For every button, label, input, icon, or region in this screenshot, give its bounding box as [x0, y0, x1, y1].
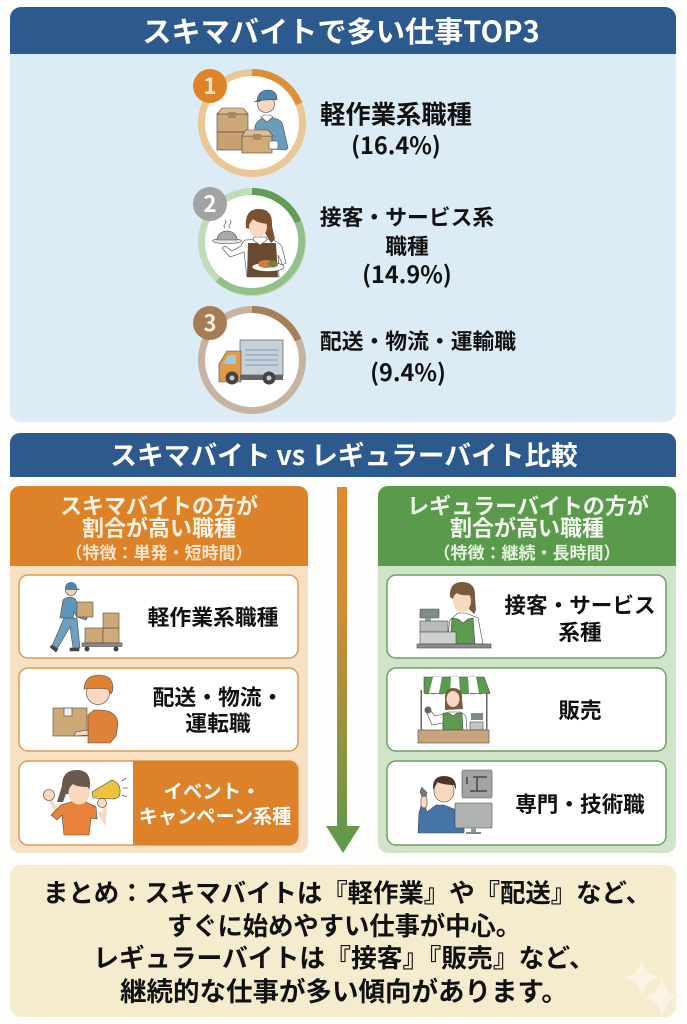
icon: delivery truck [219, 340, 283, 384]
label: キャンペーン系種 [139, 801, 291, 829]
label: 配送・物流・ [153, 681, 283, 712]
card: customer service [387, 575, 666, 658]
rank badge 1: 1 [204, 69, 216, 101]
summary text: すぐに始めやすい仕事が中心。 [167, 907, 521, 943]
label: light work: 軽作業系職種 [320, 96, 472, 132]
rank 1: light work [193, 69, 472, 174]
label: light work [320, 96, 472, 161]
label: 系種 [558, 616, 602, 647]
label: delivery: (9.4%) [370, 354, 446, 388]
panel: summary [10, 865, 677, 1017]
panel header: skima: （特徴：単発・短時間） [66, 539, 252, 564]
ring 1 [202, 72, 302, 174]
panel header: skima: スキマバイトの方が [60, 489, 258, 521]
icon: worker with boxes [217, 90, 288, 153]
label [139, 775, 291, 829]
heading: top 3: スキマバイトで多い仕事TOP3 [142, 9, 540, 51]
label [504, 589, 656, 647]
label: 専門・技術職 [515, 788, 645, 819]
icon: worker with cart [50, 582, 122, 652]
label: customer service [320, 201, 494, 290]
heading: comparison: スキマバイト vs レギュラーバイト比較 [110, 434, 578, 473]
panel: regular baito [378, 486, 676, 853]
rank badge 3 [193, 306, 227, 340]
rank 3: delivery [193, 306, 516, 410]
label: customer service: 職種 [385, 230, 429, 261]
summary text [43, 874, 651, 1009]
label: light work: (16.4%) [351, 127, 441, 161]
icon: cashier [417, 582, 491, 648]
label: customer service: 接客・サービス系 [320, 201, 494, 232]
label: 運転職 [185, 707, 251, 738]
ring 3 [202, 310, 302, 410]
ring 2 [202, 192, 302, 292]
panel header: regular: 割合が高い職種 [450, 511, 604, 543]
icon: woman with megaphone [44, 770, 128, 835]
panel header: regular [378, 486, 676, 566]
card: event [19, 761, 298, 845]
label: 接客・サービス [504, 589, 656, 620]
rank 2: customer service [193, 187, 494, 292]
label: customer service: (14.9%) [362, 256, 452, 290]
card: light work [19, 575, 298, 658]
panel header: regular: （特徴：継続・長時間） [434, 539, 620, 564]
icon: technician [418, 770, 492, 834]
icon: delivery person with box [53, 675, 118, 743]
icon: shop stall [418, 677, 490, 743]
label: delivery [320, 325, 516, 388]
panel header: skima: 割合が高い職種 [82, 511, 236, 543]
panel: skima baito [10, 486, 308, 853]
card: delivery [19, 668, 298, 751]
panel header: skima [10, 486, 308, 566]
rank badge 1 [193, 69, 227, 103]
panel header: regular: レギュラーバイトの方が [407, 489, 649, 521]
label: delivery: 配送・物流・運輸職 [320, 325, 516, 356]
panel: top 3 jobs [10, 7, 676, 422]
rank badge 3: 3 [204, 306, 216, 338]
rank badge 2: 2 [204, 187, 216, 219]
heading: top 3 [10, 7, 676, 54]
label [153, 681, 283, 738]
arrow: skima to regular [326, 487, 360, 853]
summary text: レギュラーバイトは『接客』『販売』など、 [93, 938, 595, 975]
icon: server with plates [212, 209, 286, 277]
summary text: まとめ：スキマバイトは『軽作業』や『配送』など、 [43, 874, 651, 910]
card: sales [387, 668, 666, 751]
heading: comparison [10, 433, 676, 477]
card: technical [387, 761, 666, 845]
label: 軽作業系職種 [148, 601, 279, 632]
icon: sparkle watermark [624, 960, 677, 1017]
label: 販売 [558, 694, 602, 725]
summary text: 継続的な仕事が多い傾向があります。 [120, 970, 568, 1009]
label: イベント・ [164, 775, 260, 804]
rank badge 2 [193, 187, 227, 221]
